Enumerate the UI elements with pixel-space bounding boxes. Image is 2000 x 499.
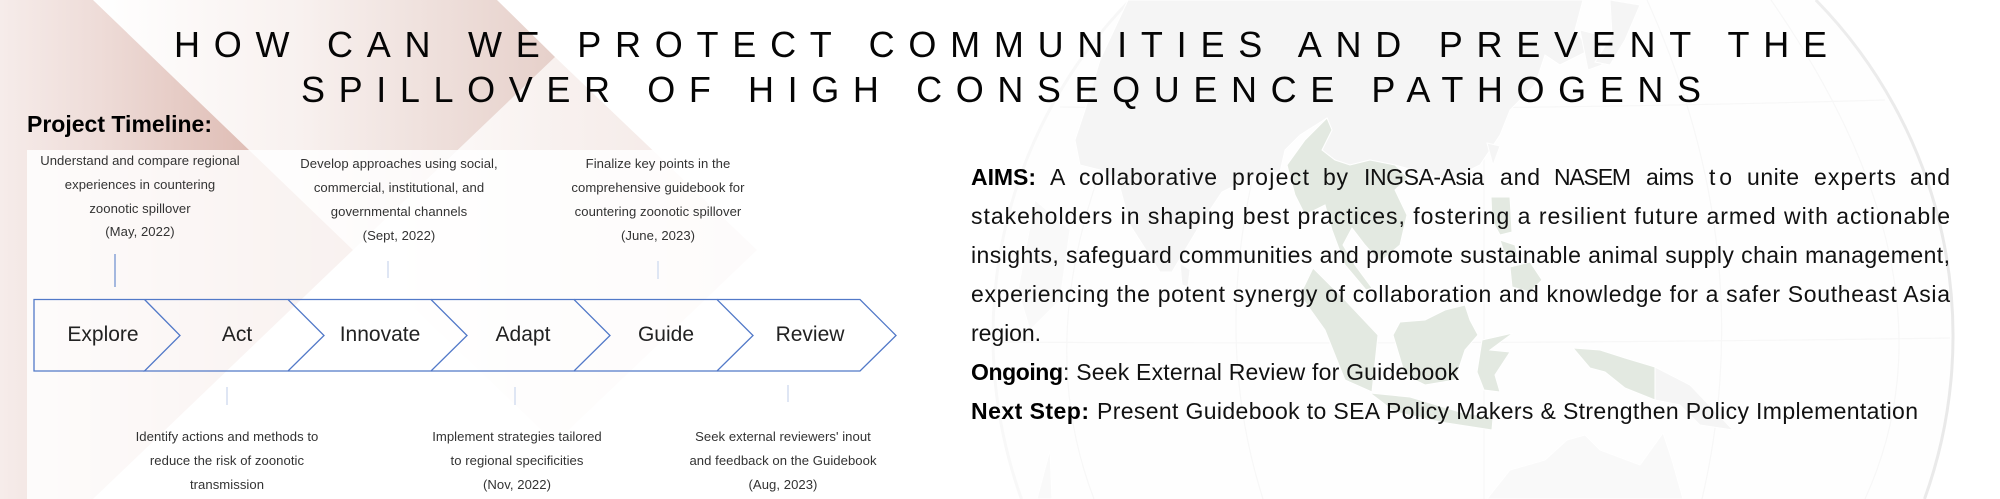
milestone: act: transmission [190,477,264,492]
milestone: review: and feedback on the Guidebook [689,453,877,468]
aims text block: aims [1646,164,1694,190]
chevron timeline: Review [776,323,845,346]
aims text block: unite [1747,164,1799,190]
milestone: act: reduce the risk of zoonotic [150,453,304,468]
aims text block: stakeholders in shaping best practices, fostering a resilient future armed with actionable [971,203,1950,229]
ongoing status: Ongoing [971,359,1063,385]
milestone: innovate: governmental channels [331,204,468,219]
title: SPILLOVER OF HIGH CONSEQUENCE PATHOGENS [301,69,1701,110]
milestone: explore [40,153,240,239]
aims text block: NASEM [1554,164,1631,190]
milestone: guide: (June, 2023) [621,228,695,243]
aims text block: INGSA-Asia [1364,164,1484,190]
milestone: innovate [300,156,498,243]
aims text block: and [1500,164,1540,190]
milestone: adapt [432,429,602,492]
milestone: act [136,429,318,492]
milestone: innovate: (Sept, 2022) [363,228,435,243]
aims text block: AIMS: [971,164,1036,190]
milestone: review [689,429,877,492]
aims text block [971,164,1950,346]
milestone: adapt: (Nov, 2022) [483,477,551,492]
next step: Present Guidebook to SEA Policy Makers & Strengthen Policy Implementation [1097,398,1918,424]
heading: project timeline: Project Timeline: [27,111,212,137]
aims text block: to [1709,164,1732,190]
milestone: guide [571,156,745,243]
connector ticks [115,254,788,405]
milestone: review: Seek external reviewers' inout [695,429,871,444]
milestone: act: Identify actions and methods to [136,429,318,444]
title: HOW CAN WE PROTECT COMMUNITIES AND PREVENT THE [174,24,1827,65]
background: pink triangles [0,0,757,499]
milestone: explore: (May, 2022) [105,224,175,239]
next step: Next Step: [971,398,1089,424]
milestone: review: (Aug, 2023) [749,477,817,492]
aims text block: experts [1814,164,1896,190]
milestone: guide: countering zoonotic spillover [575,204,742,219]
chevron timeline: Guide [638,323,694,346]
milestone: explore: Understand and compare regional [40,153,240,168]
aims text block: experiencing the potent synergy of collaboration and knowledge for a safer Southeast Asia [971,281,1950,307]
aims text block: region. [971,320,1041,346]
ongoing status: : Seek External Review for Guidebook [1063,359,1460,385]
title [174,24,1827,110]
chevron timeline [34,300,896,371]
timeline backing panel [27,150,907,499]
aims text block: project [1232,164,1310,190]
milestone: innovate: commercial, institutional, and [314,180,484,195]
milestone: innovate: Develop approaches using social, [300,156,498,171]
chevron timeline: Adapt [496,323,551,346]
chevron timeline: Innovate [340,323,420,346]
chevron timeline: Act [222,323,252,346]
aims text block: insights, safeguard communities and promote sustainable animal supply chain management, [971,242,1950,268]
aims text block: and [1910,164,1950,190]
milestone: explore: experiences in countering [65,177,215,192]
aims text block: A [1050,164,1066,190]
background: globe map [993,0,1953,499]
milestone: adapt: to regional specificities [451,453,584,468]
chevron timeline: Explore [67,323,139,346]
aims text block: collaborative [1079,164,1217,190]
milestone: guide: Finalize key points in the [586,156,730,171]
milestone: explore: zoonotic spillover [89,201,191,216]
milestone: guide: comprehensive guidebook for [571,180,745,195]
milestone: adapt: Implement strategies tailored [432,429,602,444]
aims text block: by [1323,164,1348,190]
